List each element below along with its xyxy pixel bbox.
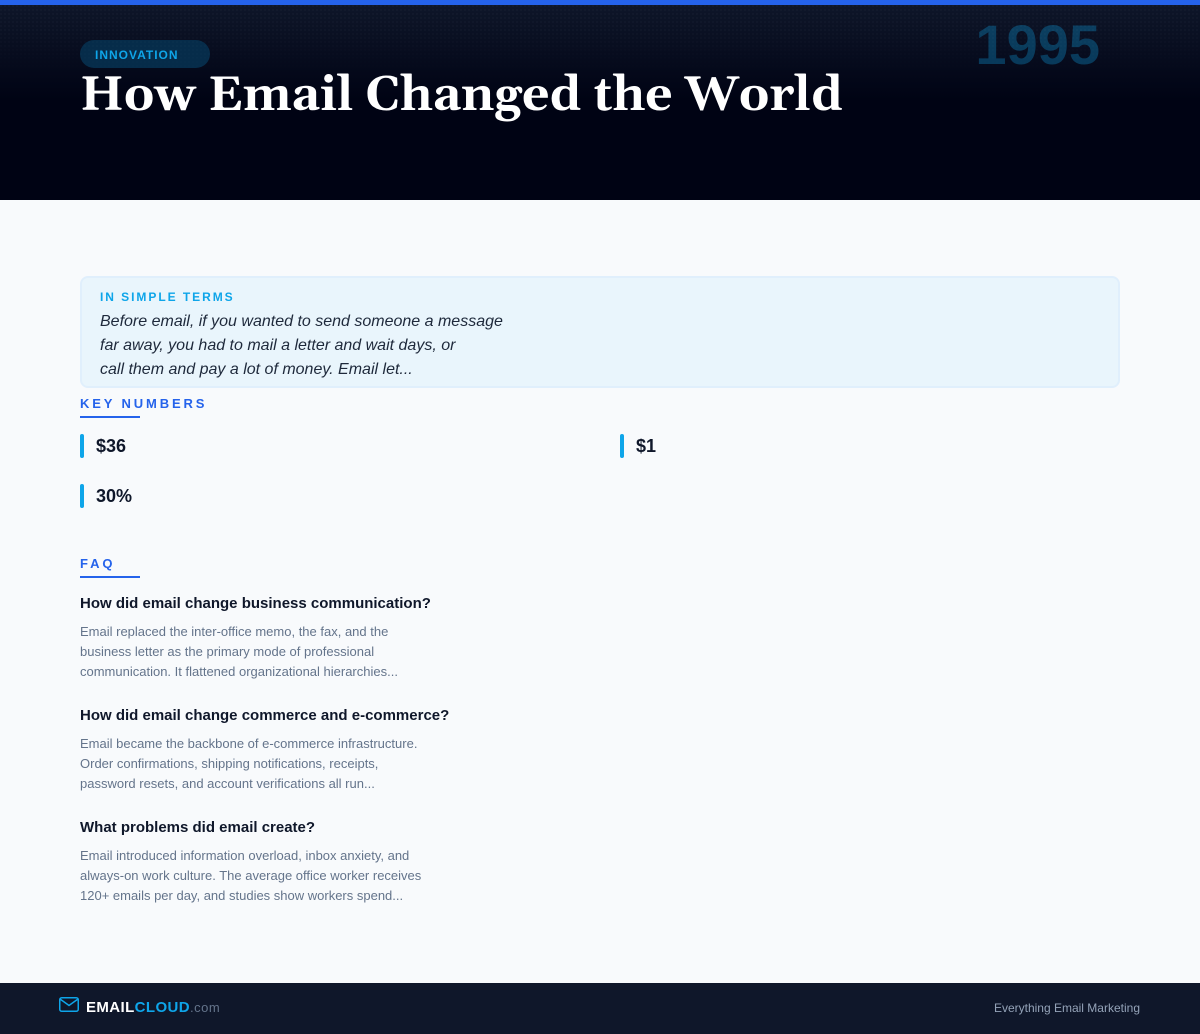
panel: in simple terms bbox=[80, 276, 1120, 388]
faq item 3: Email introduced information overload, inbox anxiety, and bbox=[80, 848, 409, 863]
footer brand: EMAILCLOUD.com bbox=[86, 999, 220, 1016]
faq item 3: always-on work culture. The average office worker receives bbox=[80, 868, 421, 883]
faq item 2: Email became the backbone of e-commerce infrastructure. bbox=[80, 736, 417, 751]
faq item 1: How did email change business communication? bbox=[80, 595, 431, 612]
panel text: call them and pay a lot of money. Email let... bbox=[100, 361, 413, 378]
panel label: IN SIMPLE TERMS bbox=[100, 290, 235, 304]
faq item 1: communication. It flattened organizational hierarchies... bbox=[80, 664, 398, 679]
faq item 1 bbox=[80, 595, 431, 679]
header banner bbox=[0, 0, 1200, 200]
icon: envelope bbox=[59, 997, 79, 1012]
stat: $1: $1 bbox=[636, 436, 656, 456]
panel text: far away, you had to mail a letter and wait days, or bbox=[100, 337, 455, 354]
stat: $1 bbox=[620, 434, 656, 458]
footer tagline: Everything Email Marketing bbox=[994, 1001, 1140, 1015]
faq item 2: Order confirmations, shipping notifications, receipts, bbox=[80, 756, 378, 771]
category pill bbox=[80, 40, 210, 68]
heading: FAQ: FAQ bbox=[80, 556, 115, 571]
faq item 2 bbox=[80, 707, 449, 791]
panel text bbox=[100, 313, 503, 378]
year watermark: 1995 bbox=[975, 13, 1100, 76]
footer bbox=[0, 983, 1200, 1034]
stat: 30%: 30% bbox=[96, 486, 132, 506]
heading: key numbers: KEY NUMBERS bbox=[80, 396, 207, 411]
faq item 2: password resets, and account verifications all run... bbox=[80, 776, 375, 791]
faq item 3: 120+ emails per day, and studies show workers spend... bbox=[80, 888, 403, 903]
stat: $36: $36 bbox=[96, 436, 126, 456]
faq item 1: Email replaced the inter-office memo, the fax, and the bbox=[80, 624, 388, 639]
top accent bar bbox=[0, 0, 1200, 5]
stat: $36 bbox=[80, 434, 126, 458]
faq item 1: business letter as the primary mode of professional bbox=[80, 644, 374, 659]
category pill: INNOVATION bbox=[95, 48, 179, 62]
faq item 3 bbox=[80, 819, 421, 903]
panel text: Before email, if you wanted to send someone a message bbox=[100, 313, 503, 330]
stat: 30% bbox=[80, 484, 132, 508]
faq item 2: How did email change commerce and e-commerce? bbox=[80, 707, 449, 724]
faq item 3: What problems did email create? bbox=[80, 819, 315, 836]
title: How Email Changed the World bbox=[80, 66, 843, 127]
dotted texture overlay bbox=[0, 5, 1200, 80]
